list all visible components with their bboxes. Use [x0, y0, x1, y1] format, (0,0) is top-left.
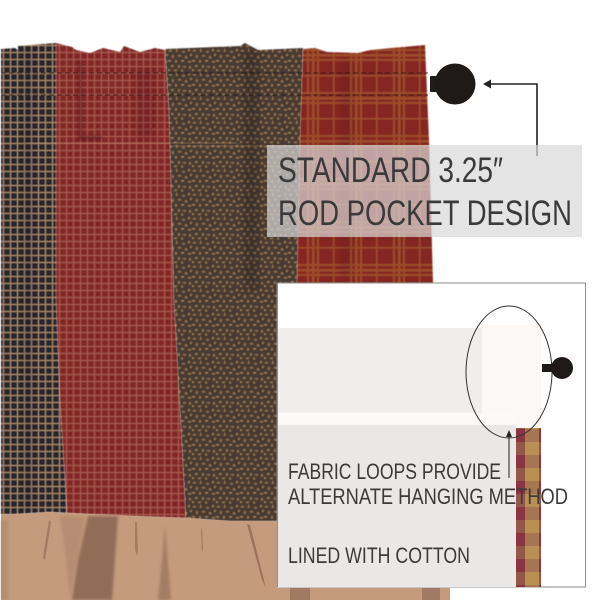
- label: fabric loops: FABRIC LOOPS PROVIDE: [288, 459, 501, 484]
- small rod finial: [542, 357, 573, 379]
- fabric loop: [482, 325, 541, 428]
- lined fabric pale fold: [278, 413, 516, 425]
- curtain rod finial: [430, 64, 476, 104]
- curtain: [0, 43, 450, 600]
- fabric panel: brown speckle: [165, 43, 303, 521]
- lined fabric lower panel: [278, 425, 516, 587]
- ruffle folds: [0, 516, 440, 600]
- ruffle: [1, 512, 450, 600]
- fabric folds and shading: [25, 50, 352, 510]
- fabric panel: red plaid: [297, 45, 433, 283]
- lined fabric upper band: [278, 328, 482, 413]
- fabric panel: red check: [56, 43, 186, 518]
- highlight ellipse: [466, 306, 552, 438]
- callout line: standard size: STANDARD 3.25″: [278, 151, 503, 190]
- seam stitching: [27, 143, 300, 146]
- small arrow to loop: [506, 430, 512, 478]
- plaid edge strip: [516, 428, 541, 587]
- callout: rod pocket design: [267, 145, 582, 237]
- rod pocket stitching: [1, 73, 428, 95]
- arrow to finial: [483, 80, 537, 156]
- inset panel: lining detail: [278, 283, 586, 587]
- label: lined with cotton: LINED WITH COTTON: [288, 543, 470, 568]
- fabric panel: navy check: [1, 43, 67, 515]
